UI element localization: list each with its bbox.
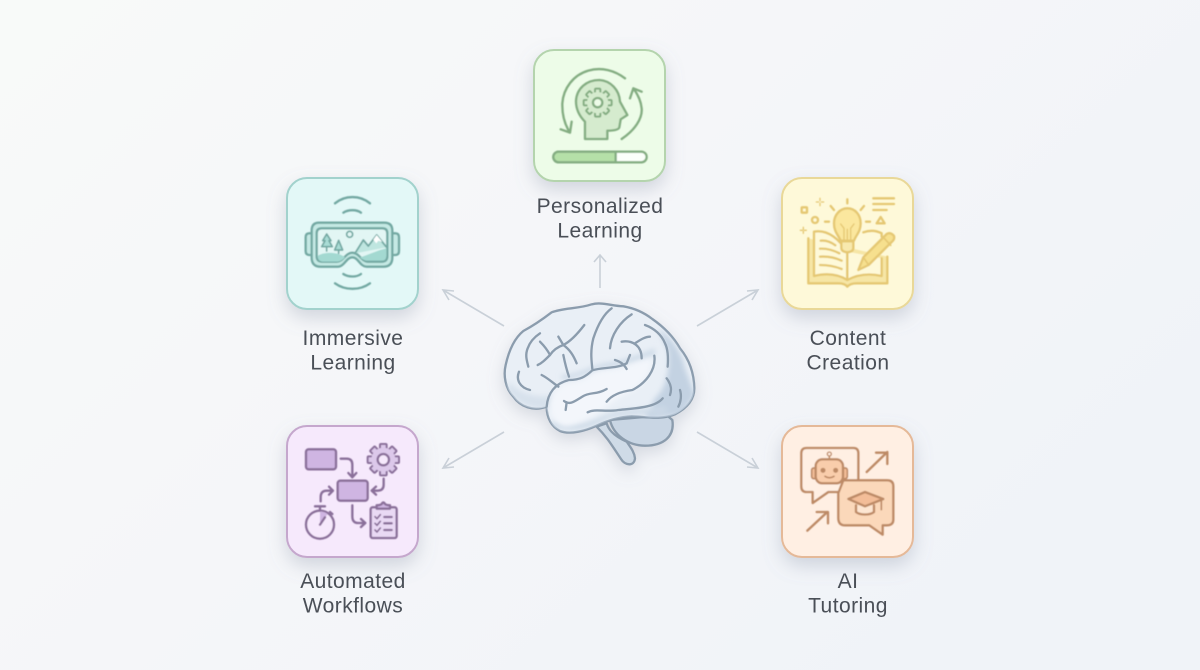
arrow: to automated workflows — [443, 432, 504, 468]
panel: immersive learning — [287, 178, 418, 374]
temporal lobe highlight — [550, 358, 652, 427]
arrow: to AI tutoring — [697, 432, 758, 468]
card: immersive learning — [287, 178, 418, 309]
card: personalized learning — [534, 50, 665, 181]
icon: head with gear and progress bar — [553, 69, 647, 162]
label: automated workflows: Workflows — [303, 594, 403, 618]
panel: content creation — [782, 178, 913, 374]
card: content creation — [782, 178, 913, 309]
icon: VR goggles — [306, 197, 399, 289]
label: immersive learning: Immersive — [303, 327, 403, 350]
card: AI tutoring — [782, 426, 913, 557]
panel: automated workflows — [287, 426, 418, 618]
icon: robot and graduation cap chat bubbles — [801, 448, 893, 535]
brain shading — [508, 328, 695, 430]
label: automated workflows: Automated — [300, 570, 406, 593]
card: automated workflows — [287, 426, 418, 557]
label: content creation: Content — [810, 327, 886, 350]
label: personalized learning: Learning — [557, 220, 643, 242]
label: personalized learning: Personalized — [537, 195, 663, 218]
panel: personalized learning — [534, 50, 665, 242]
label: AI tutoring: AI — [838, 570, 858, 593]
panel: AI tutoring — [782, 426, 913, 618]
label: AI tutoring: Tutoring — [808, 594, 888, 618]
icon: book with lightbulb and pencil — [800, 198, 894, 287]
label: immersive learning: Learning — [310, 352, 396, 374]
arrow: to immersive learning — [443, 290, 504, 326]
arrow: to content creation — [697, 290, 758, 326]
arrow: to personalized learning — [594, 255, 606, 288]
central brain illustration — [505, 303, 695, 464]
label: content creation: Creation — [807, 352, 889, 374]
icon: workflow diagram — [306, 444, 399, 539]
